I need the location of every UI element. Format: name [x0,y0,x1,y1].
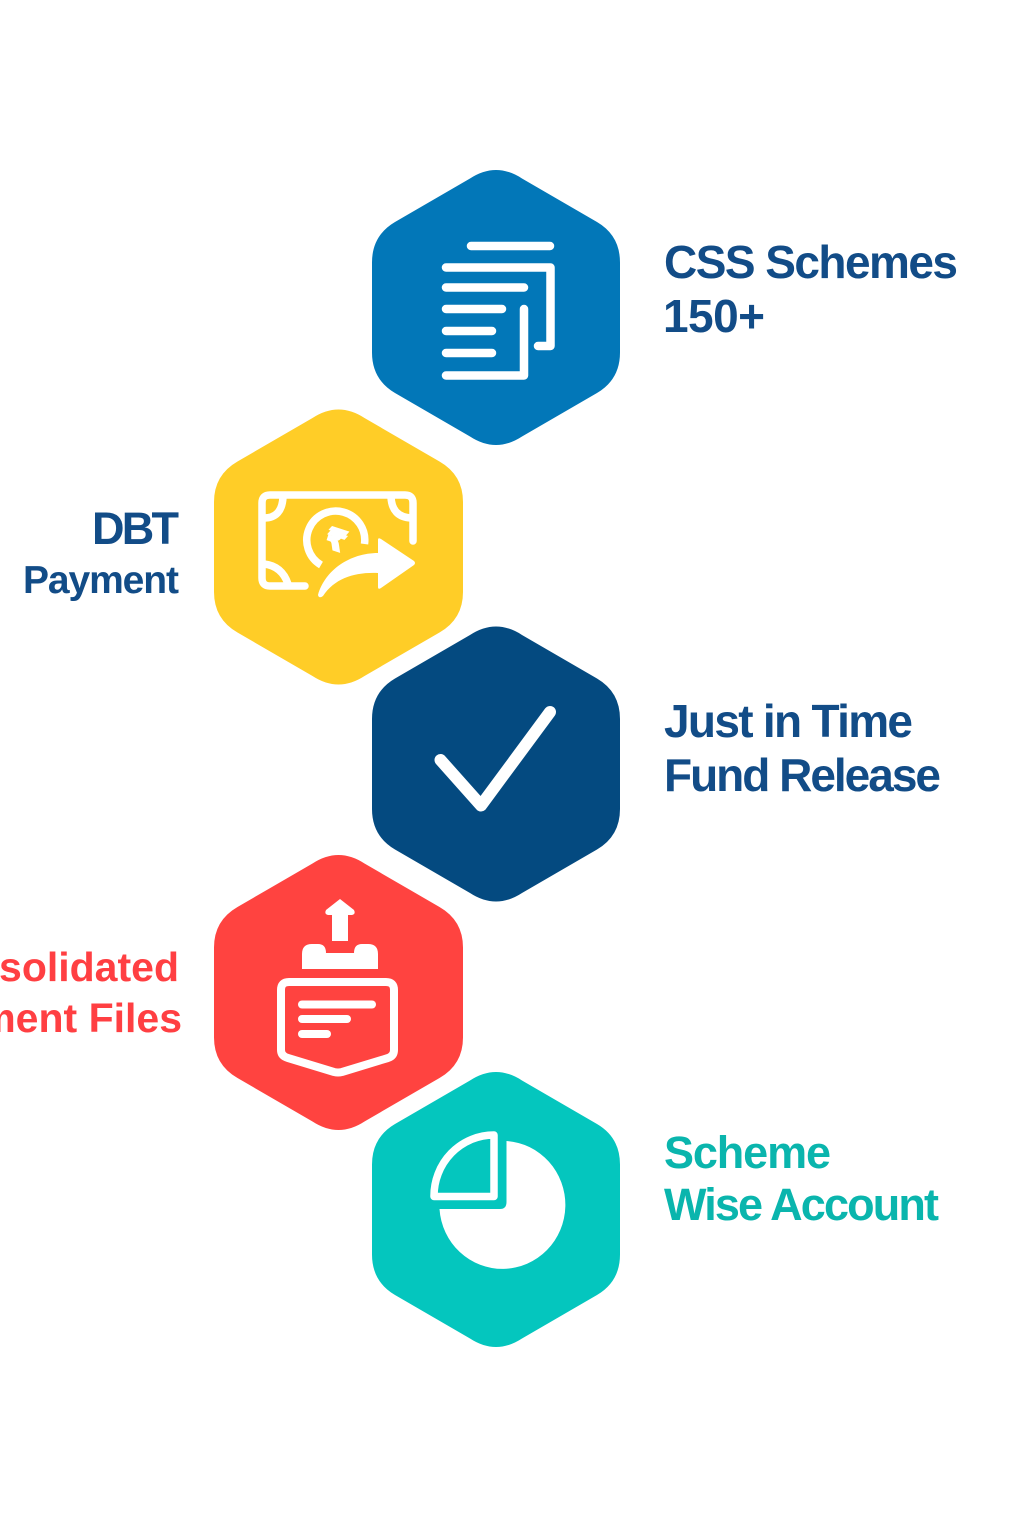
blue hexagon [372,170,620,445]
icon: upload file pocket [281,899,394,1072]
label: CSS Schemes 150+ [663,236,958,342]
icon: check mark [440,712,550,806]
label: CSS Schemes 150+: CSS Schemes [664,236,958,288]
icon: banknote with rupee and arrow [262,495,415,597]
label: Just in Time Fund Release [664,695,941,801]
label: DBT Payment: DBT [92,503,179,554]
panel: CSS Schemes [372,170,958,445]
label: Scheme Wise Account [664,1127,939,1230]
label: DBT Payment [23,503,179,602]
teal hexagon [372,1072,620,1347]
yellow hexagon [214,410,463,684]
icon: banknote with rupee and arrow: ₹ [321,521,351,559]
label: Scheme Wise Account: Scheme [664,1127,831,1178]
label: Scheme Wise Account: Wise Account [664,1179,939,1230]
icon: stacked documents [446,246,550,376]
label: DBT Payment: Payment [23,559,179,602]
label: Just in Time Fund Release: Just in Time [664,695,913,747]
label: Just in Time Fund Release: Fund Release [664,749,941,801]
navy hexagon [372,626,620,902]
label: CSS Schemes 150+: 150+ [663,290,765,342]
icon: pie chart [434,1135,565,1269]
panel: Consolidated Payment Files [0,855,463,1130]
panel: DBT Payment [23,410,463,684]
red hexagon [214,855,463,1130]
panel: Just in Time Fund Release [372,626,941,902]
panel: Scheme Wise Account [372,1072,939,1347]
label: Consolidated Payment Files [0,944,182,1041]
